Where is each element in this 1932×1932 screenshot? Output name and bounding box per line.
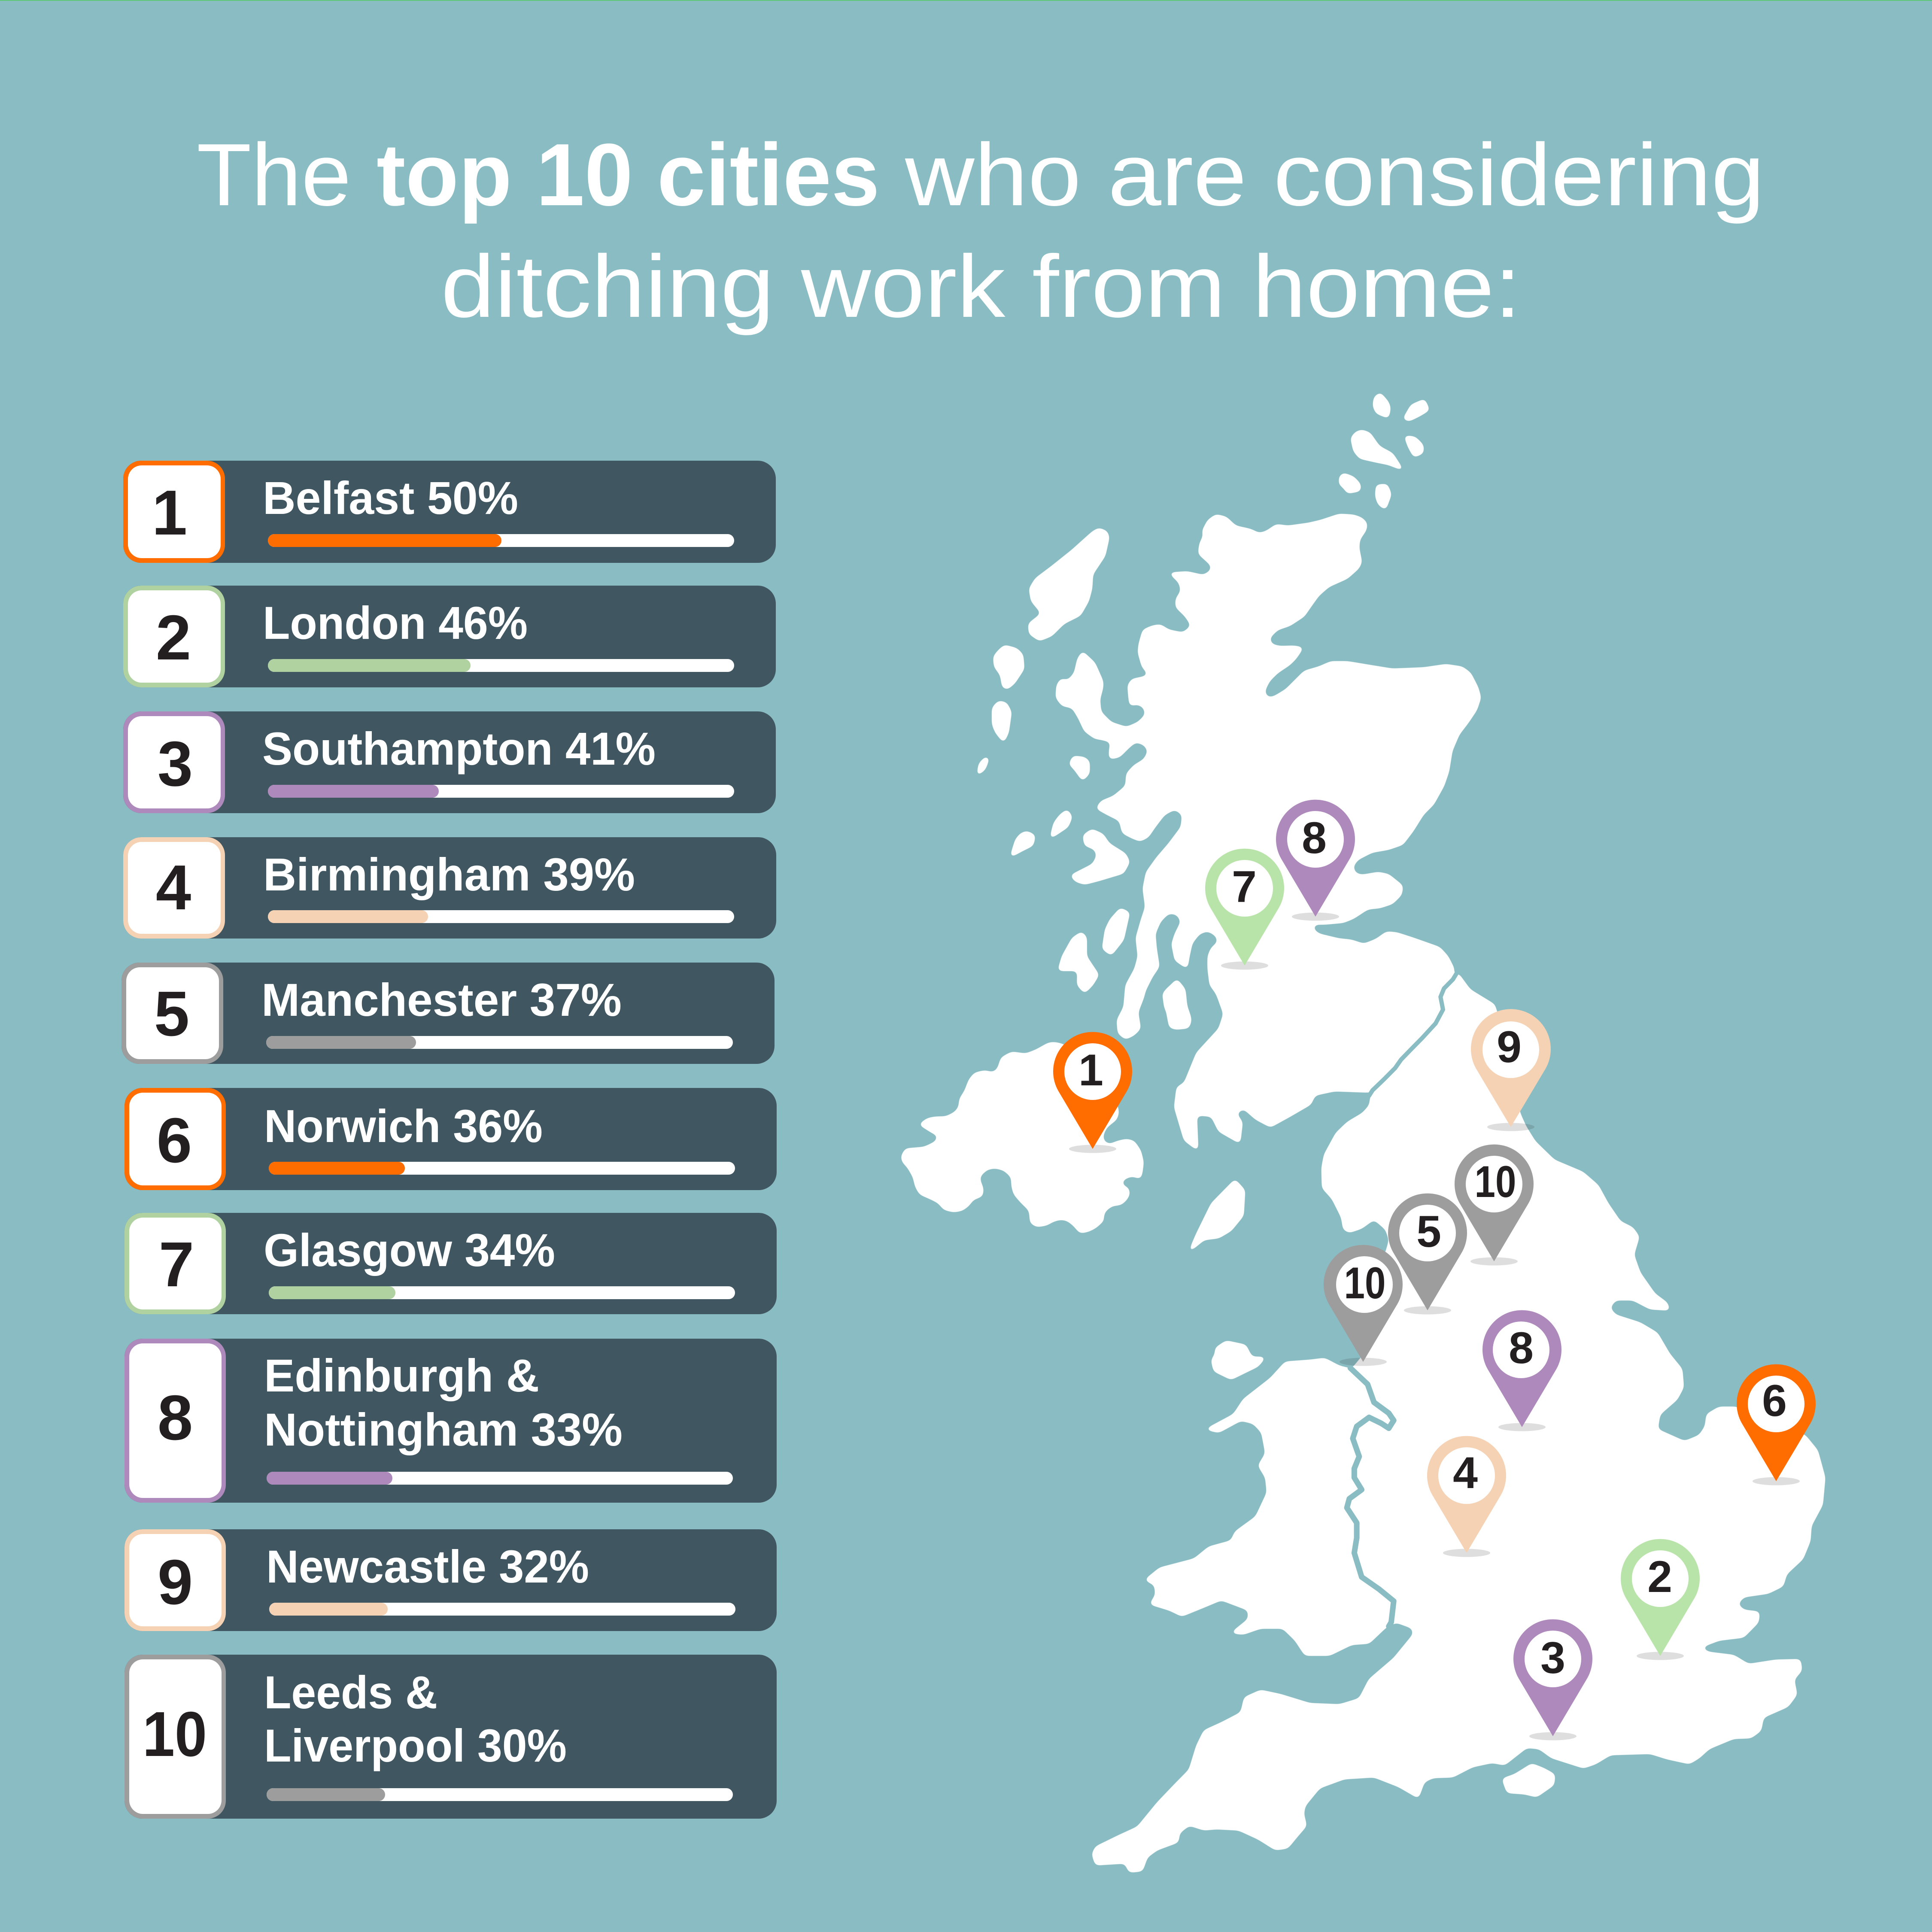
panel: rank 7 Glasgow: Glasgow 34% [264,1224,555,1276]
panel: rank 10 Leeds and Liverpool: 10 [143,1699,207,1770]
panel: rank 8 Edinburgh and Nottingham: 8 [158,1382,193,1453]
panel: rank 3 Southampton: 3 [158,729,193,799]
panel: rank 3 Southampton: Southampton 41% [262,723,656,775]
title [197,125,1765,336]
panel: rank 6 Norwich: 6 [157,1105,192,1176]
panel: rank 9 Newcastle: 9 [158,1547,193,1618]
pin: Nottingham 8 [1482,1310,1561,1431]
panel: rank 9 Newcastle: Newcastle 32% [266,1540,589,1592]
panel: rank 8 Edinburgh and Nottingham: Nottingham 33% [264,1403,623,1455]
pin: Newcastle 9 [1471,1009,1551,1131]
pin: London 2: 2 [1647,1552,1672,1602]
panel: rank 9 Newcastle [125,1529,777,1631]
pin: Southampton 3: 3 [1540,1633,1565,1683]
panel: rank 4 Birmingham [123,837,776,939]
pin: Glasgow 7 [1205,849,1284,969]
panel: rank 7 Glasgow: 7 [159,1229,194,1300]
pin: Birmingham 4: 4 [1453,1448,1478,1498]
panel: rank 2 London: London 46% [263,597,528,649]
pin: Birmingham 4 [1427,1436,1506,1557]
pin: Edinburgh 8 [1276,800,1355,920]
panel: rank 7 Glasgow [125,1213,777,1314]
panel: rank 5 Manchester: 5 [154,978,189,1049]
panel: rank 10 Leeds and Liverpool [125,1655,777,1819]
panel: rank 6 Norwich [125,1088,777,1190]
title: who are considering [905,125,1765,224]
title: top 10 cities [377,125,880,224]
panel: rank 5 Manchester: Manchester 37% [261,974,622,1026]
pin: Liverpool 10: 10 [1344,1258,1386,1308]
pin: Newcastle 9: 9 [1497,1022,1522,1072]
pin: Manchester 5: 5 [1416,1207,1441,1257]
panel: rank 3 Southampton [123,711,776,813]
title: The [197,125,351,224]
pin: Leeds 10 [1455,1145,1534,1266]
panel: rank 10 Leeds and Liverpool: Liverpool 30% [264,1719,567,1771]
panel: rank 1 Belfast: Belfast 50% [263,472,518,524]
panel: rank 10 Leeds and Liverpool: Leeds & [264,1666,437,1718]
panel: rank 8 Edinburgh and Nottingham: Edinburgh & [264,1349,539,1401]
pin: Leeds 10: 10 [1474,1157,1516,1207]
panel: rank 1 Belfast [123,461,776,563]
pin: Southampton 3 [1513,1619,1592,1741]
pin: Nottingham 8: 8 [1509,1323,1534,1373]
title: ditching work from home: [441,237,1521,336]
panel: rank 8 Edinburgh and Nottingham [125,1339,777,1503]
map of the UK [901,392,1825,1872]
panel: rank 6 Norwich: Norwich 36% [264,1100,543,1152]
panel: rank 1 Belfast: 1 [152,477,187,548]
pin: Norwich 6: 6 [1762,1376,1787,1426]
pin: Liverpool 10 [1324,1245,1403,1366]
panel: rank 2 London [123,586,776,687]
pin: Manchester 5 [1388,1194,1467,1315]
pin: Norwich 6 [1737,1364,1816,1485]
pin: Edinburgh 8: 8 [1302,813,1327,863]
panel: rank 4 Birmingham: Birmingham 39% [263,848,635,900]
pin: Glasgow 7: 7 [1232,862,1257,912]
panel: rank 5 Manchester [122,963,775,1064]
panel: rank 2 London: 2 [156,602,191,673]
panel: rank 4 Birmingham: 4 [156,852,191,923]
pin: Belfast 1 [1053,1032,1132,1153]
pin: Belfast 1: 1 [1078,1045,1103,1095]
pin: London 2 [1621,1539,1700,1660]
